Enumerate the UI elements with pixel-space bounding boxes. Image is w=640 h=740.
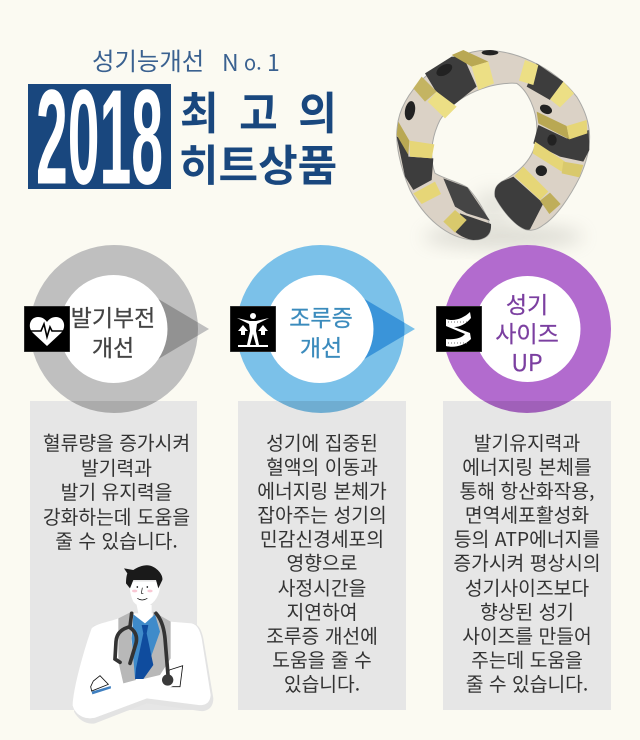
subtitle: 1 [267,44,280,78]
icon: heart with pulse [24,306,70,352]
icon: body with arrows [230,306,276,352]
panel 2 background [238,401,406,710]
panel 3 text: 향상된 성기 [480,597,574,625]
panel 3 text [453,428,601,697]
label: 성기 사이즈 UP: 사이즈 [495,314,559,348]
panel 1 text [43,428,190,554]
panel 2 text: 있습니다. [284,669,360,697]
subtitle: 성기능개선 [92,43,204,78]
panel 3 text: 면역세포활성화 [465,500,589,528]
panel 3 text: 에너지링 본체를 [462,452,592,480]
panel 2 text: 민감신경세포의 [260,524,384,552]
panel 1 background [30,401,197,710]
panel 2 text: 조루증 개선에 [266,621,378,649]
panel 1 text: 강화하는데 도움을 [43,502,190,530]
panel 1 text: 발기 유지력을 [61,477,172,505]
label: 발기부전 개선 [71,299,155,362]
panel 1 text: 발기력과 [81,453,152,481]
step 1 ring with arrow [33,245,209,401]
panel 2 text: 영향으로 [287,548,357,576]
panel 3 text: 증가시켜 평상시의 [453,548,601,576]
panel 2 text: 성기에 집중된 [266,428,378,456]
panel 3 text: 발기유지력과 [474,428,580,456]
panel 3 text: 주는데 도움을 [471,645,583,673]
label: 성기 사이즈 UP: 성기 [506,286,548,320]
panel 3 text: 통해 항산화작용, [460,476,594,504]
heading: 히트상품: 히트상품 [179,132,337,194]
label: 성기 사이즈 UP: UP [511,344,543,378]
panel 3 text: 등의 ATP에너지를 [454,524,600,552]
icon: measuring tape [436,306,482,352]
subtitle: o. [244,47,262,76]
panel 3 text: 성기사이즈보다 [465,573,589,601]
label: 발기부전 개선: 발기부전 [71,299,155,333]
panel 3 text: 줄 수 있습니다. [466,669,588,697]
step 2 ring with arrow [240,245,415,401]
illustration: doctor [72,565,214,724]
panel 2 text: 혈액의 이동과 [266,452,378,480]
product photo: ring [396,50,590,254]
label: 조루증 개선: 조루증 [289,299,353,333]
subtitle: N [222,44,239,78]
label: 성기 사이즈 UP [495,286,559,378]
panel 2 text: 도움을 줄 수 [272,645,372,673]
label: 발기부전 개선: 개선 [92,328,134,362]
panel 2 text [257,428,387,697]
label: 조루증 개선 [289,299,353,362]
panel 3 text: 사이즈를 만들어 [462,621,592,649]
step 3 ring [446,245,611,401]
label: 조루증 개선: 개선 [300,328,342,362]
panel 2 text: 사정시간을 [278,573,366,601]
heading: 최고의: 최고의 [180,78,357,143]
panel 2 text: 잡아주는 성기의 [257,500,387,528]
panel 1 text: 혈류량을 증가시켜 [43,428,190,456]
panel 2 text: 지연하여 [287,597,357,625]
subtitle [92,43,280,78]
panel 1 text: 줄 수 있습니다. [55,526,178,554]
panel 3 background [443,401,611,710]
panel 2 text: 에너지링 본체가 [257,476,387,504]
